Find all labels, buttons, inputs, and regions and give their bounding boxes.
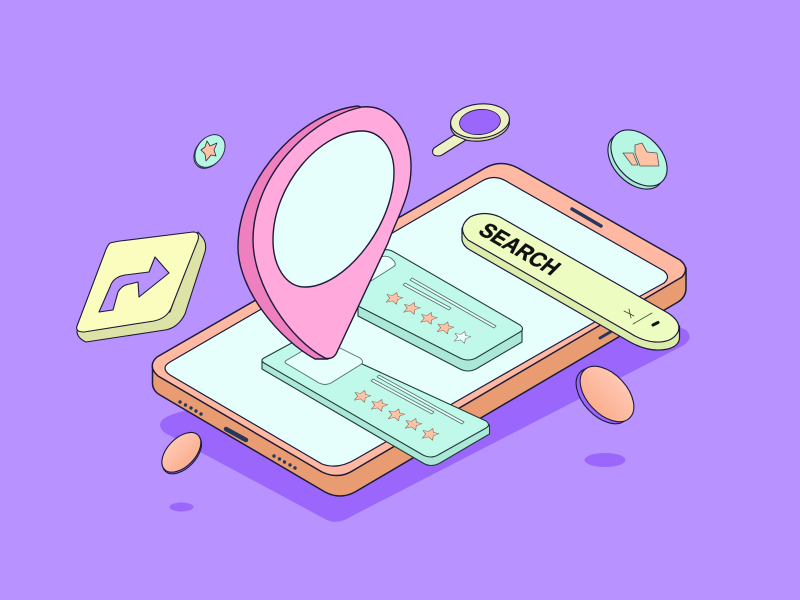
thumbs up coin bbox=[597, 119, 678, 200]
pin hole bbox=[273, 131, 394, 287]
speaker slot top bbox=[572, 209, 601, 226]
icon: star bbox=[201, 141, 217, 161]
front card stars bbox=[351, 389, 441, 441]
search bar bbox=[462, 214, 680, 350]
side button bbox=[600, 331, 612, 338]
right coin edge bbox=[566, 358, 640, 434]
back card stars bbox=[383, 291, 473, 344]
search bar top bbox=[462, 214, 679, 342]
pin front bbox=[253, 107, 411, 358]
sign face bbox=[77, 232, 198, 332]
front card side bbox=[262, 360, 490, 466]
magnifying glass bbox=[432, 101, 511, 156]
back card thumbnail bbox=[340, 256, 395, 288]
coin left bbox=[155, 425, 209, 481]
direction sign bbox=[77, 232, 206, 342]
left coin edge bbox=[155, 427, 209, 481]
phone screen bbox=[165, 178, 668, 466]
coin right bbox=[566, 356, 644, 434]
search label: SEARCH bbox=[473, 219, 566, 280]
phone shadow bbox=[160, 300, 690, 522]
front card text lines bbox=[371, 375, 464, 424]
connector port bbox=[226, 429, 246, 440]
sign depth bbox=[77, 232, 206, 342]
front card thumbnail bbox=[285, 341, 362, 384]
front card top bbox=[262, 338, 488, 457]
icon: thumbs up bbox=[623, 143, 659, 166]
coin edge bbox=[597, 122, 675, 200]
magnifier hole bbox=[458, 107, 502, 137]
location pin bbox=[238, 106, 411, 359]
phone body side bbox=[152, 268, 686, 496]
floor shadow: right coin bbox=[584, 453, 626, 467]
pin side bbox=[238, 106, 370, 359]
speaker dots right bbox=[272, 454, 297, 470]
magnifier depth bbox=[449, 104, 511, 144]
speaker dots left bbox=[178, 400, 203, 416]
review card back bbox=[300, 250, 522, 371]
review card front bbox=[262, 338, 490, 466]
magnifier handle bbox=[432, 135, 466, 156]
icon: clear x bbox=[624, 309, 634, 318]
back card top bbox=[300, 250, 522, 360]
back card side bbox=[358, 306, 522, 371]
star coin face bbox=[189, 129, 231, 173]
magnifier ring bbox=[449, 101, 511, 141]
phone bbox=[152, 164, 686, 496]
coin face bbox=[600, 119, 678, 197]
left coin face bbox=[155, 425, 208, 479]
search bar side bbox=[462, 228, 680, 350]
divider in search bar bbox=[633, 313, 652, 324]
star coin bbox=[188, 129, 231, 174]
floor shadow: left coin bbox=[170, 502, 194, 512]
star coin edge bbox=[188, 130, 230, 174]
icon: turn arrow bbox=[99, 257, 169, 312]
right coin face bbox=[570, 356, 644, 432]
icon: microphone bbox=[653, 322, 658, 325]
phone top surface bbox=[152, 164, 686, 476]
back card text lines bbox=[403, 278, 496, 328]
